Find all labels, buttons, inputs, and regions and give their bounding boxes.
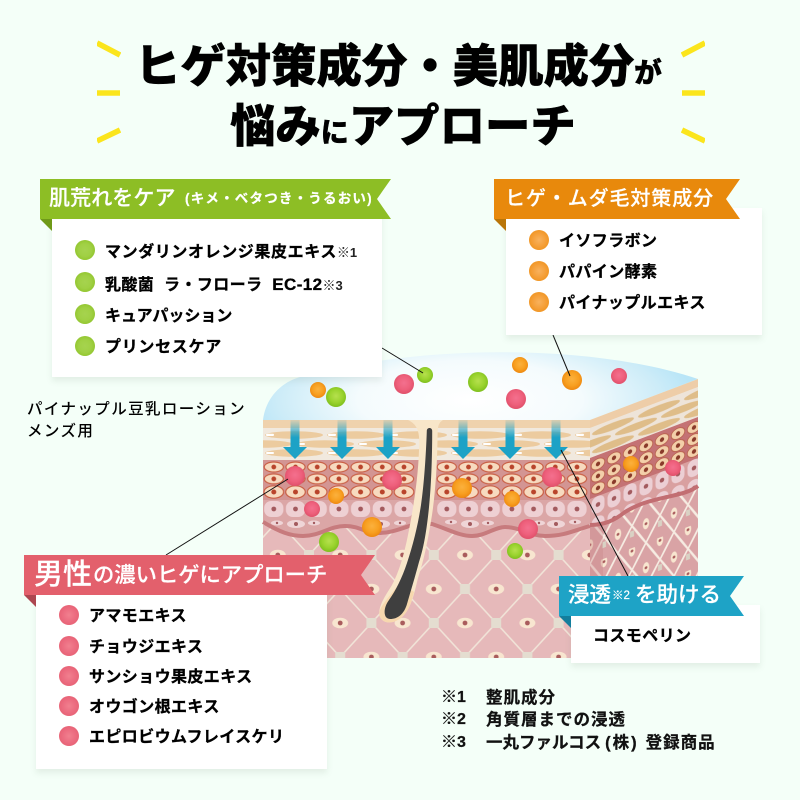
footnotes (441, 688, 716, 752)
product name note (27, 400, 246, 440)
front face: stratum corneum (263, 420, 590, 460)
orange panel body (506, 208, 762, 335)
skin cross-section illustration (166, 335, 700, 658)
green ingredient list (75, 240, 357, 356)
orange ingredient list: イソフラボン (559, 233, 657, 250)
red ingredient list: サンショウ果皮エキス (89, 669, 253, 686)
red ingredient list: チョウジエキス (89, 639, 203, 656)
title: 悩みにアプローチ (230, 101, 576, 152)
orange ingredient list (529, 230, 706, 312)
leader lines (166, 335, 628, 576)
teal banner heading: を助ける (635, 583, 721, 607)
hair shaft with follicle (379, 420, 443, 622)
title (135, 41, 662, 152)
panel: skin care ingredients (40, 179, 391, 382)
footnotes: ※3 (441, 734, 466, 751)
red ingredient list (59, 605, 284, 746)
front face: dermis (263, 525, 590, 658)
red banner fold (24, 595, 36, 607)
panel: men's thick beard ingredients (24, 555, 375, 774)
orange ingredient list: パイナップルエキス (559, 295, 706, 312)
epidermis lower border wave (263, 522, 590, 536)
front face: epidermis cell layers (263, 460, 590, 540)
red banner heading: の濃いヒゲにアプローチ (93, 563, 327, 587)
teal banner heading: ※2 (612, 590, 630, 602)
red panel body (36, 585, 327, 769)
teal banner heading: 浸透 (568, 583, 611, 607)
red banner heading: 男性 (34, 559, 92, 591)
panel: penetration support (559, 576, 760, 668)
green banner heading: (キメ・ベタつき・うるおい) (185, 191, 373, 206)
green banner fold (40, 219, 52, 231)
orange banner fold (494, 219, 506, 231)
penetration arrows (283, 420, 568, 459)
red banner heading (24, 555, 375, 595)
orange banner heading: ヒゲ・ムダ毛対策成分 (505, 188, 714, 210)
green ingredient list: プリンセスケア (105, 339, 222, 356)
title accent dashes: right (681, 40, 705, 144)
product name note: パイナップル豆乳ローション (27, 401, 246, 418)
red ingredient list: アマモエキス (89, 608, 187, 625)
right face: epidermis cell layers (590, 417, 700, 527)
moisture dome above the skin (263, 352, 698, 420)
teal banner fold (559, 616, 571, 628)
title: ヒゲ対策成分・美肌成分が (135, 41, 662, 92)
orange ingredient list: パパイン酵素 (559, 264, 657, 281)
footnotes: 角質層までの浸透 (486, 711, 626, 729)
green ingredient list: キュアパッション (105, 308, 232, 325)
product name note: メンズ用 (27, 423, 94, 440)
red ingredient list: エピロビウムフレイスケリ (89, 729, 284, 746)
footnotes: ※1 (441, 689, 466, 706)
footnotes: 一丸ファルコス(株) 登録商品 (486, 734, 716, 752)
green ingredient list: 乳酸菌 ラ・フローラ EC-12※3 (105, 275, 343, 294)
title accent dashes: left (97, 40, 121, 144)
panel: beard and body hair ingredients (494, 179, 762, 340)
teal banner heading (559, 576, 744, 616)
orange banner heading (494, 179, 740, 219)
red ingredient list: オウゴン根エキス (89, 699, 220, 716)
footnotes: 整肌成分 (486, 689, 556, 707)
ingredient spheres (285, 357, 681, 559)
teal ingredient item: コスモペリン (593, 628, 691, 645)
footnotes: ※2 (441, 711, 466, 728)
teal panel body (571, 605, 760, 663)
right face: dermis (590, 480, 698, 660)
green ingredient list: マンダリンオレンジ果皮エキス※1 (105, 244, 357, 261)
green panel body (52, 209, 382, 377)
right face: stratum corneum (590, 379, 698, 462)
green banner heading: 肌荒れをケア (49, 187, 176, 210)
green banner heading (40, 179, 391, 219)
